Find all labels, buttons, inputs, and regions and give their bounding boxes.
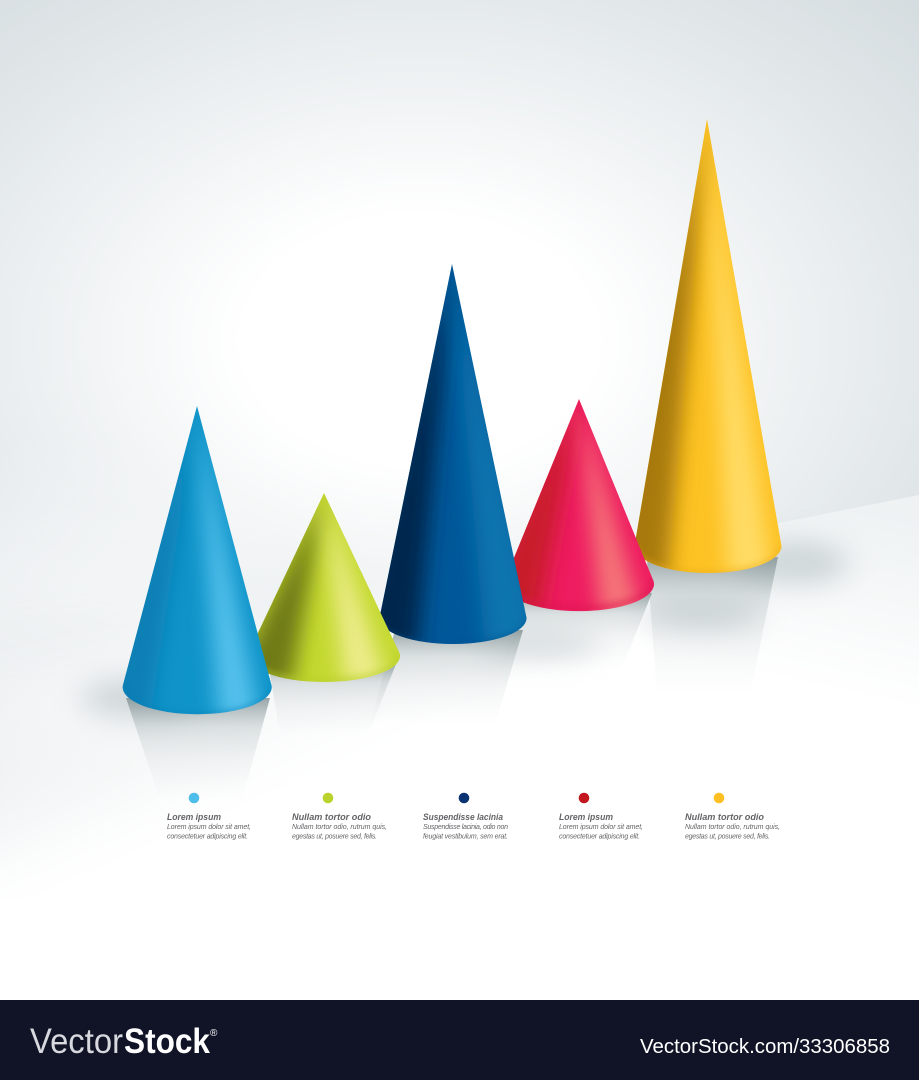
floor right plane xyxy=(640,495,919,1000)
shadow: yellow cone xyxy=(647,557,778,695)
cone: yellow xyxy=(636,119,782,573)
left wall glow xyxy=(0,510,260,770)
legend item: blue xyxy=(167,793,251,840)
shadow: red cone xyxy=(500,593,652,668)
legend item: red: Lorem ipsum xyxy=(559,812,613,822)
legend item: yellow: egestas ut, posuere sed, felis. xyxy=(685,834,770,840)
cone: red xyxy=(514,399,654,612)
white lower floor xyxy=(0,900,919,1000)
shadow: blue cone xyxy=(126,698,270,800)
footer url: VectorStock.com/33306858 xyxy=(640,1035,890,1058)
cast shadows xyxy=(126,557,778,800)
legend item: yellow: Nullam tortor odio xyxy=(685,812,765,822)
legend item: green xyxy=(292,793,387,840)
legend item: blue: consectetuer adipiscing elit. xyxy=(167,834,248,840)
soft ground shadows xyxy=(80,541,850,718)
footer logo: Stock xyxy=(124,1022,210,1061)
footer logo xyxy=(30,1022,218,1061)
legend item: blue: Lorem ipsum dolor sit amet, xyxy=(167,824,251,831)
legend item: green: Nullam tortor odio xyxy=(292,812,372,822)
shadow: green cone xyxy=(268,662,396,735)
cone: green xyxy=(258,493,400,682)
legend item: red xyxy=(559,793,643,840)
cone: navy xyxy=(380,264,526,644)
legend item: green: egestas ut, posuere sed, felis. xyxy=(292,834,377,840)
legend item: navy: Suspendisse lacinia, odio non xyxy=(423,824,508,831)
footer bar xyxy=(0,1000,919,1080)
floor plane, soft left part xyxy=(0,540,700,1080)
legend item: navy: feugiat vestibulum, sem erat. xyxy=(423,834,508,840)
shadow: navy cone xyxy=(370,630,523,725)
legend item: yellow xyxy=(685,793,780,840)
legend item: green: Nullam tortor odio, rutrum quis, xyxy=(292,824,387,831)
legend item: blue: Lorem ipsum xyxy=(167,812,221,822)
legend item: red: consectetuer adipiscing elit. xyxy=(559,834,640,840)
legend item: navy xyxy=(423,793,508,840)
cone: blue xyxy=(122,406,272,714)
legend item: navy: Suspendisse lacinia xyxy=(423,812,503,822)
footer logo: Vector xyxy=(30,1022,123,1061)
legend item: yellow: Nullam tortor odio, rutrum quis, xyxy=(685,824,780,831)
footer logo: ® xyxy=(210,1028,218,1039)
legend item: red: Lorem ipsum dolor sit amet, xyxy=(559,824,643,831)
